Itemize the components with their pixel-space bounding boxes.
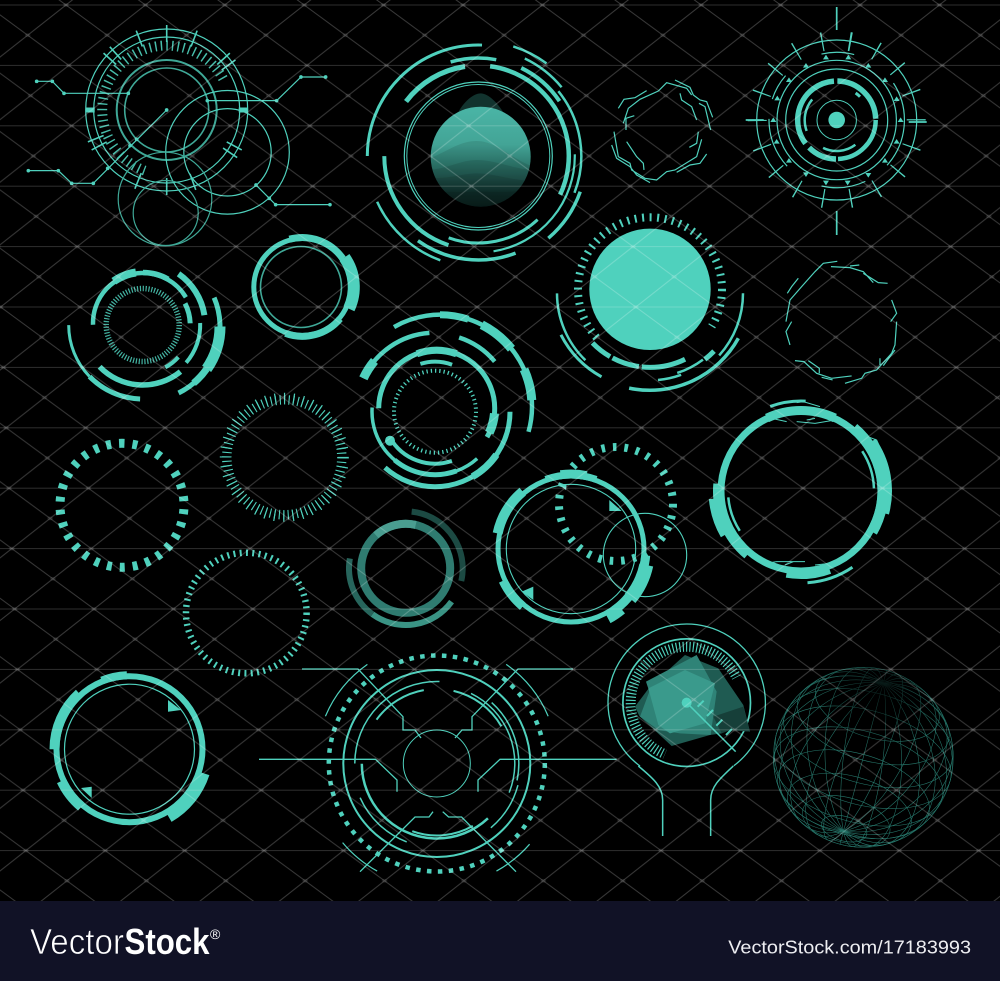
solid disc [589, 229, 711, 350]
tick circle [394, 371, 476, 453]
footer band [0, 901, 1000, 981]
panel: wireframe globe [773, 667, 954, 848]
outer right jagged arc [43, 223, 249, 430]
panel: large targeting reticle [259, 590, 617, 937]
panel: solid disc gauge [513, 152, 787, 427]
tick circle [106, 288, 179, 362]
reticle connector lines [259, 669, 617, 872]
top-left main dial [80, 23, 253, 197]
panel: thick ring, row two [231, 215, 374, 359]
panel: dim teal ring [327, 489, 485, 647]
outer top arc [314, 281, 566, 532]
panel: large gauge with shaded sphere [366, 44, 583, 262]
panel: jagged ring with tick circle, row two left [38, 220, 249, 430]
main jagged arc [362, 334, 511, 483]
panel: thick ring with triangles, bottom left [24, 644, 235, 855]
shaded sphere [428, 93, 533, 212]
dashed circle [559, 447, 673, 561]
logo: VectorStock: Vector [30, 921, 124, 962]
panel: thick ring, right [673, 363, 929, 619]
inner and lower arcs [330, 307, 540, 517]
short tick ring [186, 553, 307, 673]
panel: thin wavy ring, top centre-right [612, 80, 713, 183]
panel: top-left overlapping circles with connector lines [28, 23, 330, 246]
right jagged arcs [38, 220, 247, 430]
thin circle [603, 513, 687, 597]
panel: thin jagged ring, right [786, 261, 897, 383]
panel: dial with polygons and stem [577, 593, 797, 836]
gauge rings and arcs [333, 11, 623, 301]
radar triangles [770, 55, 904, 185]
panel: layered jagged ring with ticks, centre [314, 281, 566, 532]
dotted outer ring [329, 656, 545, 872]
logo: VectorStock: Stock [124, 921, 210, 962]
image ID: VectorStock.com/17183993 [728, 936, 971, 957]
fine tick ring [225, 398, 343, 516]
upper jagged arc [72, 252, 214, 394]
overlapping thin circles [118, 90, 289, 246]
logo: VectorStock [30, 921, 221, 962]
connector lines [28, 77, 330, 205]
panel: radar dial, top right [741, 7, 932, 235]
panel: overlapping ring pair with dashed circle [461, 439, 687, 659]
logo: VectorStock: ® [210, 926, 221, 942]
thick ring [461, 439, 681, 659]
overlapping translucent polygons [635, 655, 750, 746]
ring markers [522, 484, 622, 600]
needle and stems [638, 701, 736, 836]
dashed ring, middle left [58, 441, 186, 570]
